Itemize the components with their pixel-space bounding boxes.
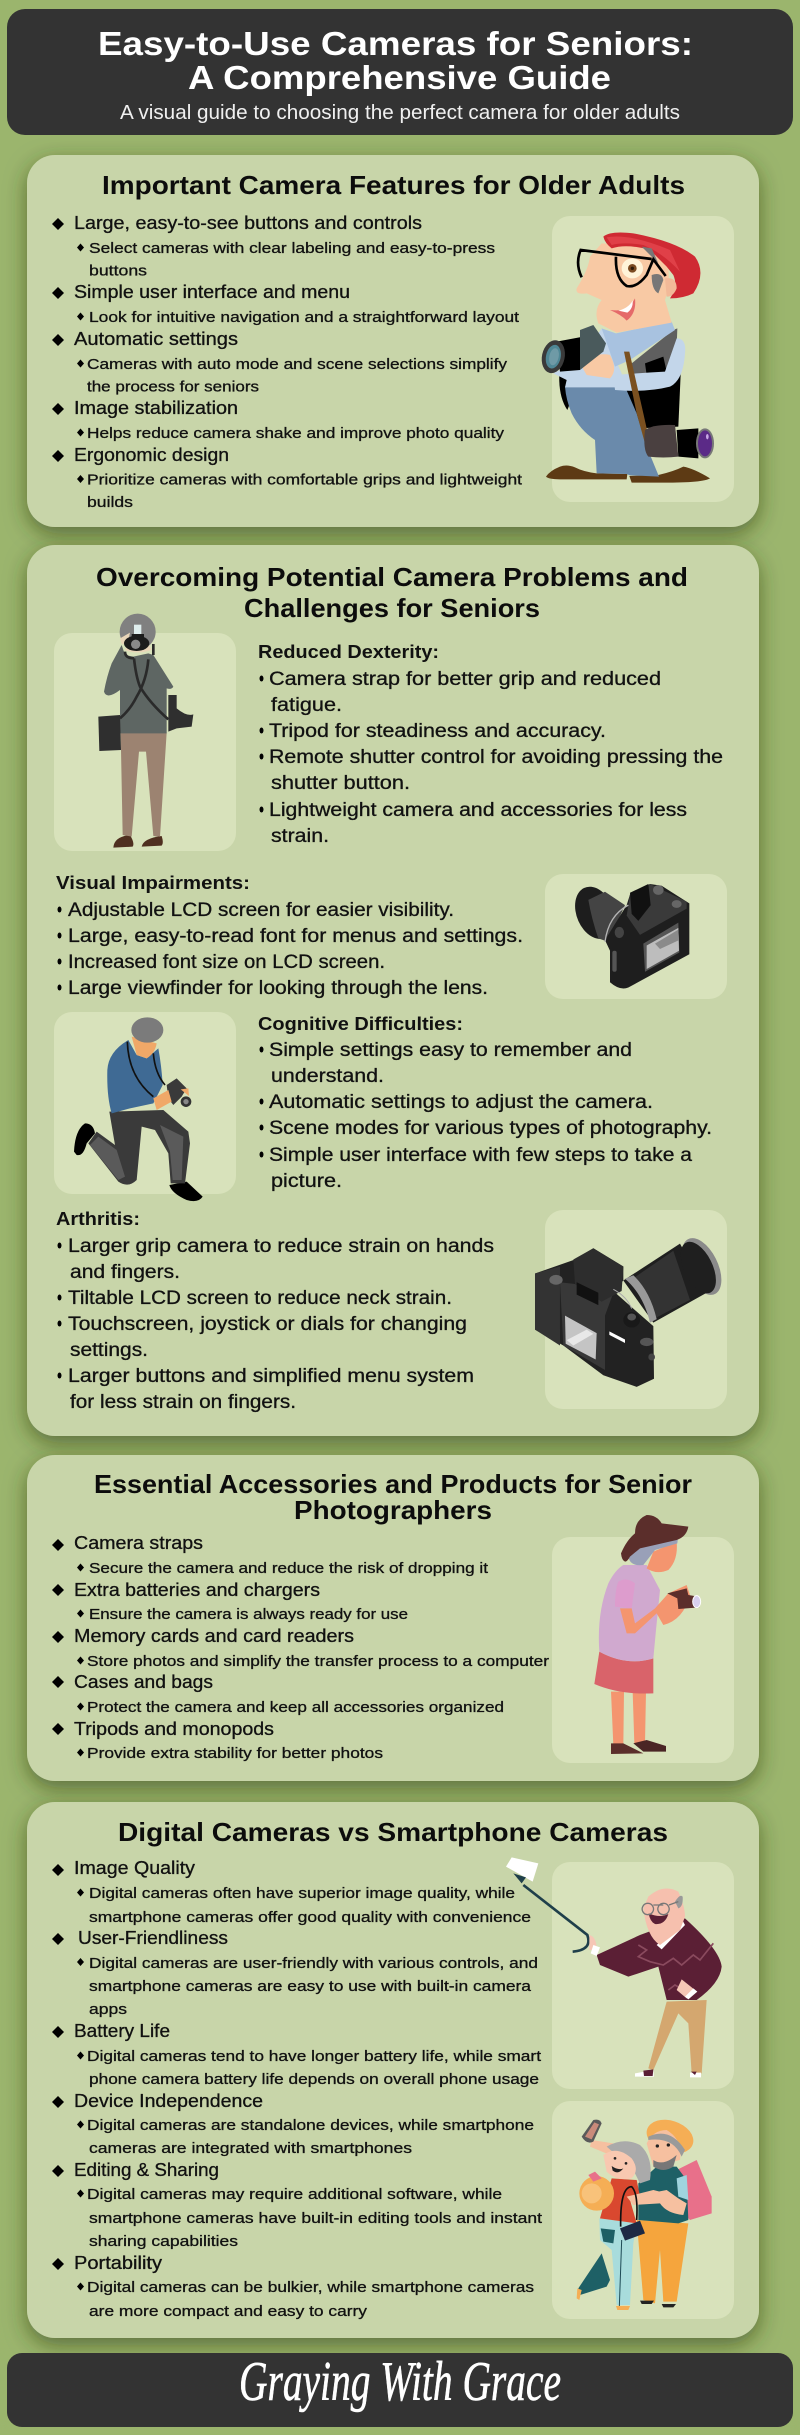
feature list: Image stabilization [74, 398, 238, 418]
feature list: Simple user interface and menu [74, 282, 350, 302]
text block: reduced dexterity: Remote shutter control for avoiding pressing the [269, 747, 723, 768]
comparison list: Digital cameras often have superior image quality, while [89, 1885, 515, 1902]
text block: visual impairments: Adjustable LCD screen for easier visibility. [68, 900, 454, 921]
text block: cognitive difficulties: Scene modes for various types of photography. [269, 1118, 712, 1139]
text block: cognitive difficulties: Simple settings easy to remember and [269, 1040, 632, 1061]
accessories list [52, 1533, 549, 1762]
accessories list: Protect the camera and keep all accessories organized [87, 1699, 504, 1716]
title: A Comprehensive Guide [188, 59, 611, 96]
brand name: Graying With Grace [239, 2351, 561, 2413]
illustration card: couple taking selfie [552, 2101, 734, 2319]
text block: arthritis: Tiltable LCD screen to reduce neck strain. [68, 1288, 452, 1309]
comparison list: cameras are integrated with smartphones [89, 2140, 412, 2157]
feature list: Cameras with auto mode and scene selections simplify [87, 356, 508, 373]
accessories list: Ensure the camera is always ready for use [89, 1606, 408, 1623]
text block: reduced dexterity: fatigue. [271, 695, 342, 716]
comparison list: Digital cameras tend to have longer battery life, while smart [87, 2048, 542, 2065]
illustration card: kneeling photographer [54, 1012, 236, 1201]
text block: reduced dexterity: Tripod for steadiness and accuracy. [269, 721, 606, 742]
text block: arthritis: and fingers. [70, 1262, 180, 1283]
text block: visual impairments: Visual Impairments: [56, 872, 250, 893]
comparison list: Digital cameras are user-friendly with various controls, and [89, 1955, 538, 1972]
heading: overcoming problems: Challenges for Seniors [244, 593, 540, 623]
heading: accessories: Essential Accessories and Products for Senior [94, 1469, 692, 1499]
comparison list: Digital cameras are standalone devices, while smartphone [87, 2117, 534, 2134]
feature list: Ergonomic design [74, 445, 229, 465]
title: Easy-to-Use Cameras for Seniors: [98, 25, 693, 62]
comparison list: apps [89, 2001, 127, 2018]
comparison list: Editing & Sharing [74, 2160, 219, 2180]
text block: cognitive difficulties: Automatic settings to adjust the camera. [269, 1092, 653, 1113]
accessories list: Cases and bags [74, 1672, 213, 1692]
text block: visual impairments: Large, easy-to-read font for menus and settings. [68, 926, 523, 947]
comparison list: User-Friendliness [78, 1928, 228, 1948]
text block: cognitive difficulties: understand. [271, 1066, 384, 1087]
panel: important camera features [27, 155, 759, 527]
illustration card: woman with camera [552, 1515, 734, 1763]
comparison list: Device Independence [74, 2091, 263, 2111]
feature list: Select cameras with clear labeling and easy-to-press [89, 240, 495, 257]
text block: arthritis: for less strain on fingers. [70, 1392, 296, 1413]
heading: overcoming problems [96, 562, 688, 623]
panel: digital vs smartphone cameras [27, 1802, 759, 2338]
accessories list: Memory cards and card readers [74, 1626, 354, 1646]
comparison list: are more compact and easy to carry [89, 2303, 368, 2320]
comparison list: smartphone cameras are easy to use with built-in camera [89, 1978, 532, 1995]
text block: arthritis: settings. [70, 1340, 148, 1361]
feature list: buttons [89, 262, 147, 280]
text block: reduced dexterity: Reduced Dexterity: [258, 641, 439, 662]
subtitle: A visual guide to choosing the perfect camera for older adults [120, 102, 680, 124]
text block: reduced dexterity [258, 641, 723, 847]
text block: arthritis: Touchscreen, joystick or dials for changing [68, 1314, 467, 1335]
text block: arthritis [56, 1208, 494, 1413]
illustration card: photographer with red cap [539, 216, 734, 502]
text block: reduced dexterity: Camera strap for better grip and reduced [269, 669, 661, 690]
heading: overcoming problems: Overcoming Potential Camera Problems and [96, 562, 688, 592]
text block: cognitive difficulties: Simple user interface with few steps to take a [269, 1145, 692, 1166]
text block: cognitive difficulties: Cognitive Difficulties: [258, 1013, 463, 1034]
heading: accessories: Photographers [294, 1495, 492, 1525]
accessories list: Extra batteries and chargers [74, 1580, 320, 1600]
accessories list: Store photos and simplify the transfer process to a computer [87, 1653, 549, 1670]
feature list: Automatic settings [74, 329, 238, 349]
illustration card: standing photographer [54, 614, 236, 851]
accessories list: Tripods and monopods [74, 1719, 274, 1739]
comparison list: Portability [74, 2253, 162, 2273]
feature list: builds [87, 494, 133, 511]
comparison list: phone camera battery life depends on overall phone usage [89, 2071, 539, 2088]
text block: cognitive difficulties: picture. [271, 1171, 342, 1192]
illustration card: camera rear view [545, 874, 727, 999]
panel: essential accessories [27, 1455, 759, 1781]
title [98, 25, 693, 96]
illustration card: man taking selfie [506, 1857, 734, 2089]
text block: reduced dexterity: shutter button. [271, 773, 410, 794]
accessories list: Provide extra stability for better photos [87, 1745, 383, 1762]
comparison list: smartphone cameras have built-in editing tools and instant [89, 2210, 543, 2227]
text block: arthritis: Arthritis: [56, 1208, 140, 1229]
accessories list: Secure the camera and reduce the risk of dropping it [89, 1560, 489, 1577]
feature list: Look for intuitive navigation and a straightforward layout [89, 309, 520, 326]
heading: accessories [94, 1469, 692, 1525]
feature list: the process for seniors [87, 378, 259, 396]
header banner [7, 9, 793, 135]
text block: visual impairments: Increased font size on LCD screen. [68, 952, 385, 973]
footer banner [7, 2351, 793, 2427]
text block: arthritis: Larger grip camera to reduce strain on hands [68, 1236, 494, 1257]
comparison list: sharing capabilities [89, 2233, 238, 2250]
feature list: Helps reduce camera shake and improve photo quality [87, 425, 505, 442]
accessories list: Camera straps [74, 1533, 203, 1553]
heading: digital vs smartphone: Digital Cameras vs Smartphone Cameras [118, 1817, 668, 1847]
text block: reduced dexterity: strain. [271, 826, 329, 847]
comparison list: smartphone cameras offer good quality with convenience [89, 1909, 531, 1926]
feature list: Prioritize cameras with comfortable grips and lightweight [87, 472, 523, 488]
feature list [52, 213, 523, 511]
feature list: Large, easy-to-see buttons and controls [74, 213, 422, 233]
comparison list: Image Quality [74, 1858, 195, 1878]
illustration card: camera with long lens [535, 1210, 730, 1409]
text block: reduced dexterity: Lightweight camera and accessories for less [269, 800, 687, 821]
text block: visual impairments: Large viewfinder for looking through the lens. [68, 978, 488, 999]
comparison list: Digital cameras may require additional software, while [87, 2186, 502, 2203]
comparison list: Battery Life [74, 2021, 170, 2041]
text block: visual impairments [56, 872, 523, 999]
panel: overcoming camera problems [27, 545, 759, 1436]
text block: arthritis: Larger buttons and simplified menu system [68, 1366, 474, 1387]
comparison list [52, 1858, 543, 2320]
heading: features: Important Camera Features for Older Adults [102, 170, 685, 200]
text block: cognitive difficulties [258, 1013, 712, 1192]
comparison list: Digital cameras can be bulkier, while smartphone cameras [87, 2279, 534, 2296]
